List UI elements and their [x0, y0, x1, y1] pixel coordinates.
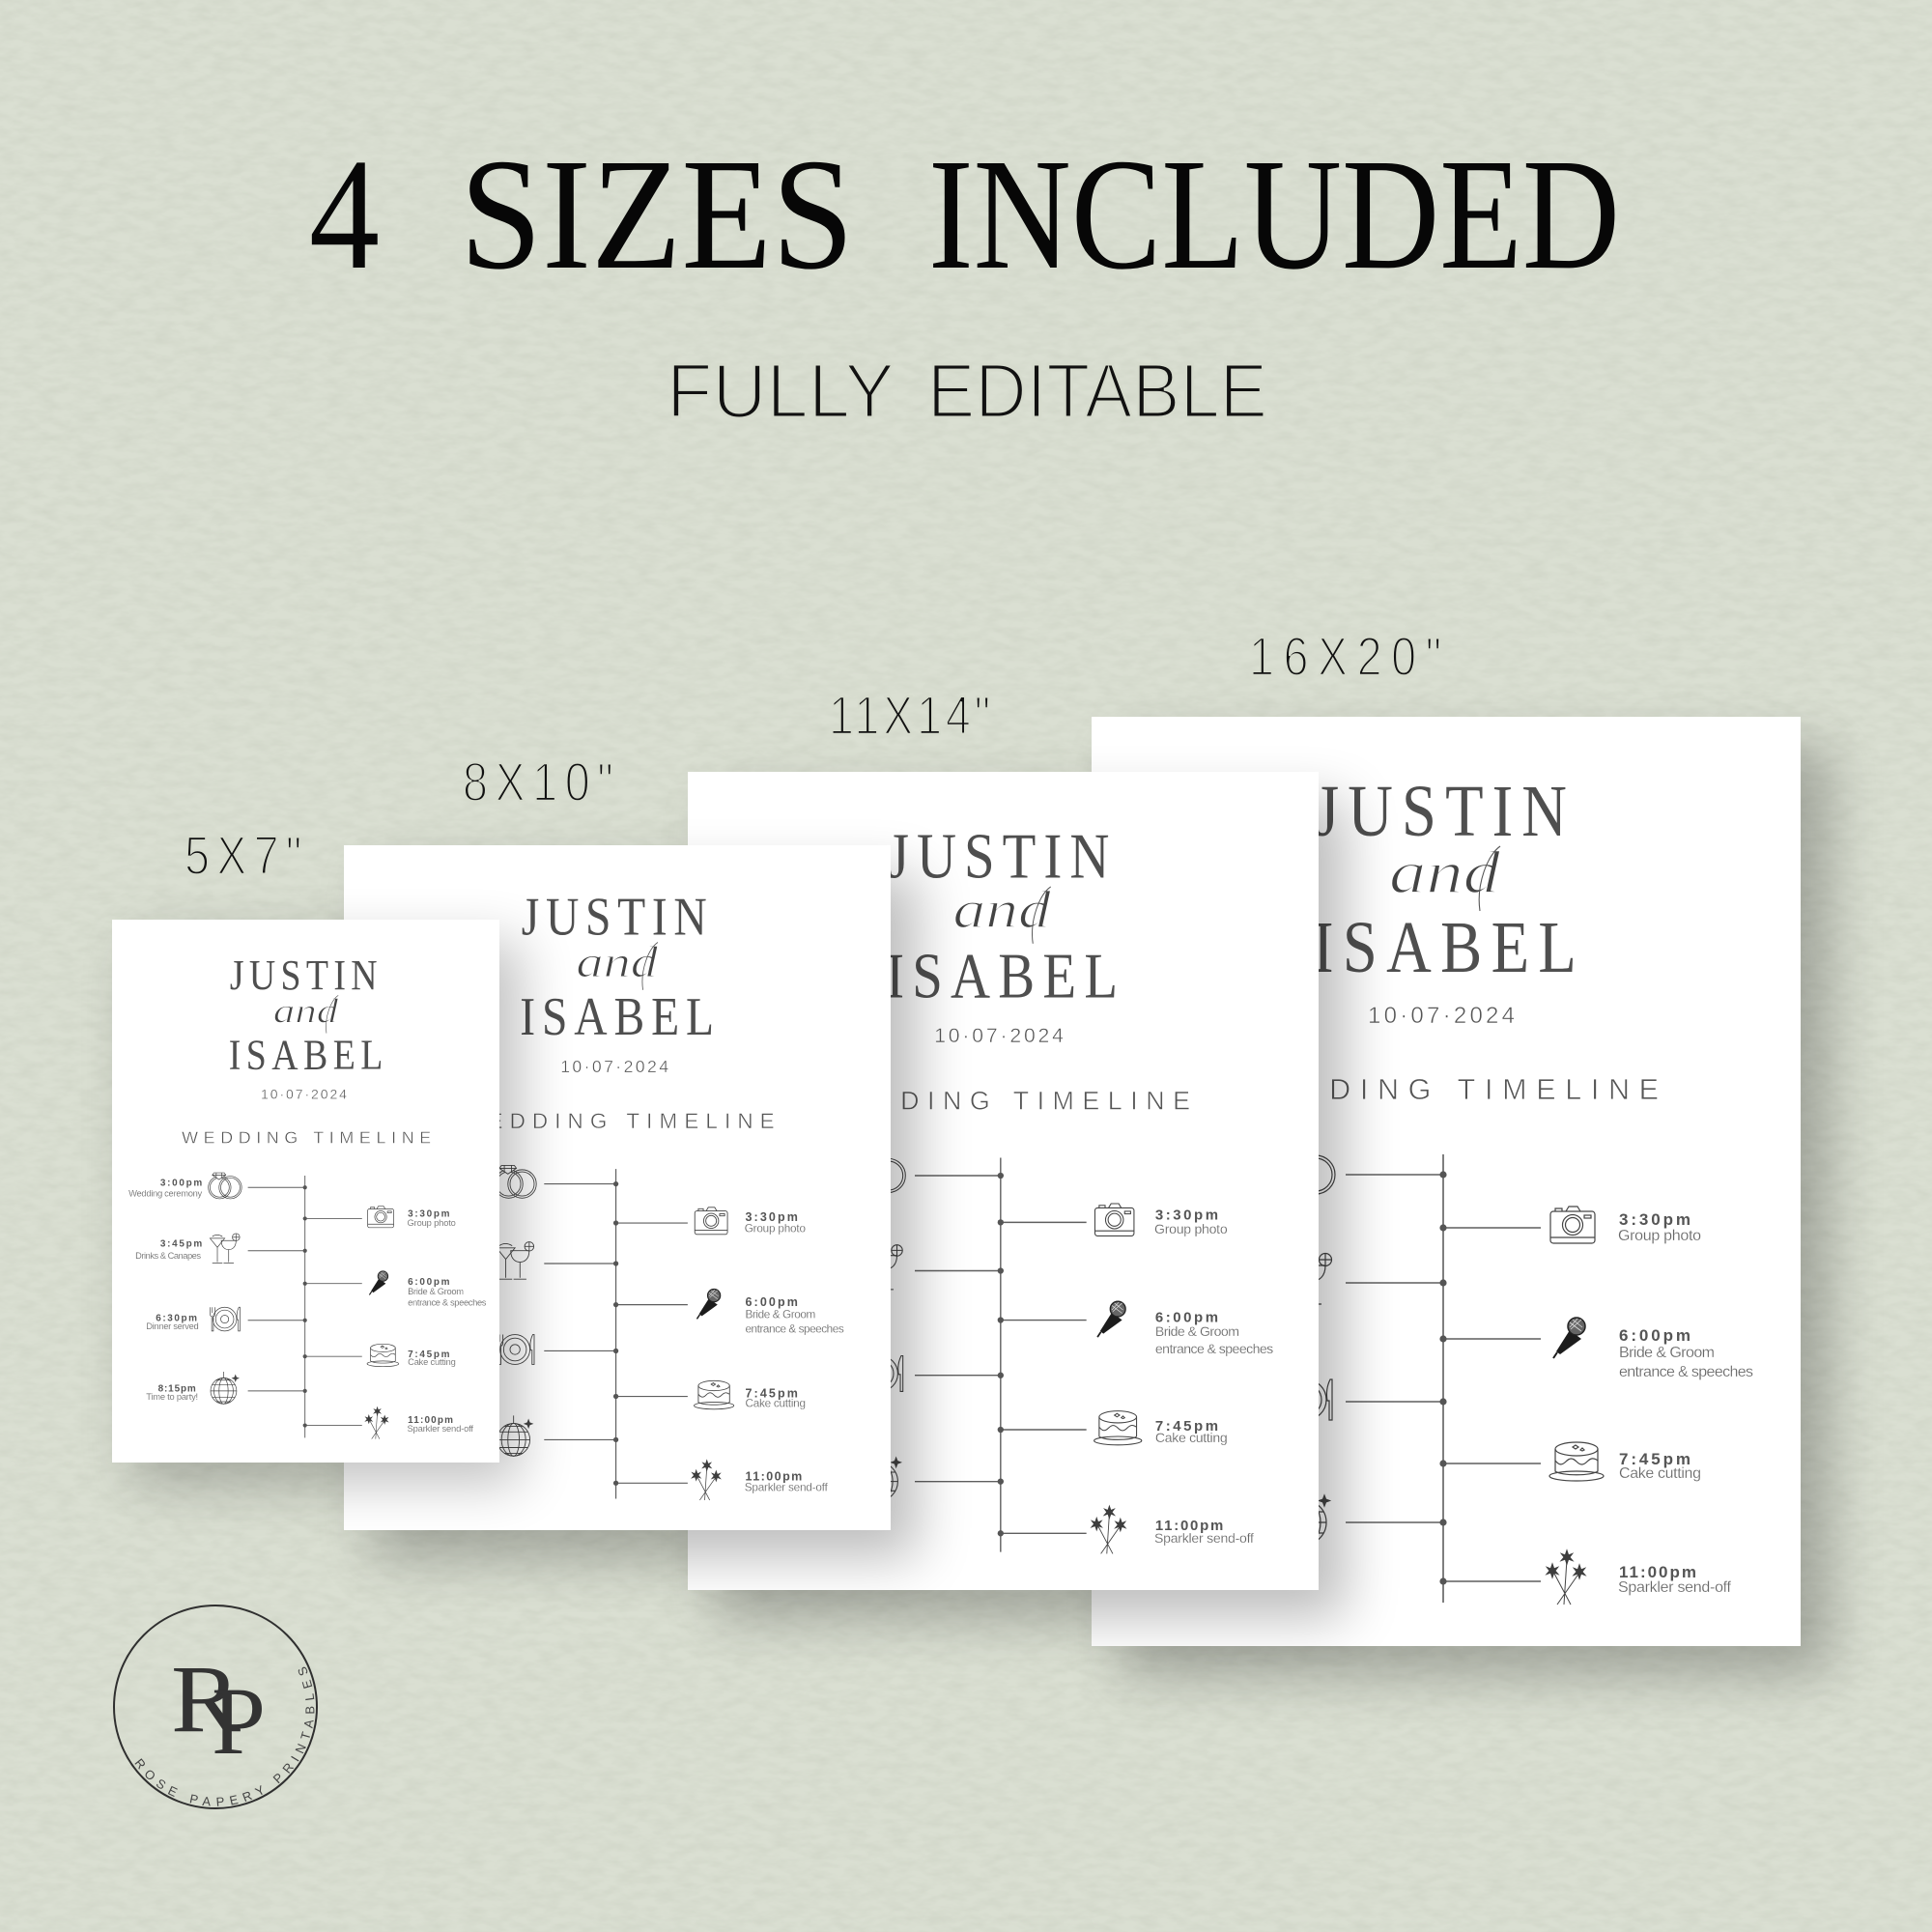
event: 7:45pm: Cake cutting [1619, 1465, 1701, 1482]
event: 3:45pm [1153, 1254, 1447, 1304]
date: 10·07·2024 [1368, 1003, 1515, 1029]
event: 6:00pm: 6:00pm [408, 1277, 450, 1288]
event: 3:45pm: Drinks & Canapes [746, 1270, 844, 1286]
event: 3:00pm: 3:00pm [783, 1160, 846, 1177]
names heading: ISABEL [886, 941, 1118, 1011]
event: 3:00pm: Wedding ceremony [735, 1177, 846, 1192]
names heading: JUSTIN [888, 821, 1109, 892]
event: 8:15pm: Time to party! [146, 1392, 198, 1402]
event: 8:15pm [762, 1453, 1004, 1501]
event: 11:00pm [613, 1459, 829, 1500]
event: 6:30pm: 6:30pm [777, 1364, 838, 1380]
event: 6:00pm: entrance & speeches [1619, 1364, 1753, 1380]
names heading: JUSTIN [230, 951, 378, 999]
event: 8:15pm [146, 1372, 307, 1404]
event: 3:30pm [303, 1207, 456, 1228]
event: 6:00pm [303, 1271, 487, 1308]
event: 3:45pm: 3:45pm [783, 1252, 846, 1268]
subtitle: FULLY [667, 348, 895, 434]
event: 3:00pm: 3:00pm [434, 1171, 487, 1184]
event: 11:00pm: Sparkler send-off [1154, 1530, 1254, 1546]
event: 7:45pm [1439, 1442, 1701, 1482]
names heading: JUSTIN [522, 888, 707, 947]
event: 3:00pm [1142, 1150, 1447, 1194]
event: 3:30pm: 3:30pm [1619, 1210, 1690, 1229]
panel: 16x20 card [1092, 717, 1801, 1646]
logo badge: ROSE PAPERY PRINTABLES [135, 1667, 315, 1806]
size label: 5x7: 5X7" [185, 826, 301, 887]
event: 8:15pm: Time to party! [416, 1441, 482, 1454]
names heading [229, 951, 383, 1078]
event: 3:00pm: Wedding ceremony [1142, 1178, 1267, 1194]
size label: 11x14: 11X14" [829, 686, 990, 747]
title: INCLUDED [928, 126, 1620, 302]
event: 3:30pm: Group photo [1154, 1221, 1228, 1236]
event: 7:45pm [998, 1411, 1228, 1445]
event: 11:00pm [303, 1406, 473, 1439]
event: 3:30pm [1439, 1207, 1701, 1244]
event: 11:00pm [1439, 1548, 1732, 1605]
panel: 8x10 card [344, 845, 891, 1530]
event: 7:45pm: Cake cutting [408, 1357, 456, 1367]
event: 6:30pm: Dinner served [416, 1352, 482, 1365]
names heading [886, 821, 1118, 1011]
event: 6:00pm: Bride & Groom [1619, 1345, 1715, 1361]
event: 7:45pm: 7:45pm [1619, 1450, 1690, 1468]
event: 3:45pm [403, 1242, 618, 1279]
event: 6:00pm [998, 1301, 1273, 1356]
event: 3:00pm: 3:00pm [1196, 1157, 1267, 1176]
panel: 5x7 card [112, 920, 499, 1463]
event: 3:00pm [735, 1153, 1004, 1193]
logo badge: R [171, 1645, 241, 1752]
logo badge: P [212, 1667, 266, 1775]
event: 11:00pm: 11:00pm [745, 1469, 802, 1483]
section title: WEDDING TIMELINE [815, 1086, 1190, 1115]
event: 6:00pm [1439, 1318, 1753, 1380]
event: 3:30pm: Group photo [408, 1218, 456, 1228]
title [309, 126, 1620, 302]
event: 6:00pm [613, 1289, 844, 1335]
names heading [520, 888, 714, 1047]
event: 11:00pm: Sparkler send-off [408, 1424, 473, 1434]
size label: 8x10: 8X10" [463, 753, 613, 813]
event: 6:30pm: 6:30pm [156, 1313, 197, 1323]
event: 3:45pm: Drinks & Canapes [135, 1251, 201, 1261]
event: 6:00pm: entrance & speeches [745, 1322, 844, 1335]
event: 7:45pm: 7:45pm [408, 1350, 450, 1360]
event: 7:45pm: 7:45pm [745, 1386, 798, 1400]
date: 10·07·2024 [560, 1057, 668, 1076]
event: 6:30pm [146, 1307, 307, 1331]
event: 3:30pm [613, 1208, 806, 1236]
event: 3:30pm: Group photo [745, 1223, 806, 1236]
event: 3:00pm: Wedding ceremony [128, 1189, 203, 1199]
event: 6:30pm: Dinner served [146, 1321, 199, 1331]
event: 11:00pm: 11:00pm [1619, 1563, 1696, 1581]
event: 6:30pm [762, 1355, 1004, 1392]
event: 11:00pm: Sparkler send-off [745, 1481, 829, 1493]
date: 10·07·2024 [934, 1025, 1064, 1047]
event: 8:15pm: 8:15pm [158, 1383, 196, 1394]
event: 3:00pm [128, 1173, 307, 1199]
section title: WEDDING TIMELINE [182, 1128, 431, 1148]
event: 3:30pm: 3:30pm [745, 1210, 798, 1224]
event: 11:00pm: 11:00pm [408, 1415, 453, 1426]
event: 7:45pm: Cake cutting [1155, 1430, 1228, 1445]
event: 6:00pm: entrance & speeches [1155, 1341, 1273, 1356]
section title: WEDDING TIMELINE [461, 1109, 775, 1133]
title: SIZES [460, 126, 854, 302]
size label: 16x20: 16X20" [1249, 627, 1441, 688]
event: 3:45pm [135, 1234, 307, 1264]
event: 8:15pm: Time to party! [1172, 1525, 1261, 1542]
event: 3:00pm: Wedding ceremony [394, 1185, 487, 1198]
timeline spine [615, 1169, 617, 1498]
event: 11:00pm [998, 1505, 1254, 1553]
names heading [1313, 771, 1577, 988]
event: 3:30pm [998, 1204, 1228, 1236]
logo badge [113, 1605, 318, 1809]
event: 6:00pm: Bride & Groom [408, 1287, 464, 1296]
names heading: ISABEL [229, 1031, 383, 1078]
event: 3:45pm: 3:45pm [160, 1239, 202, 1250]
event: 8:15pm: Time to party! [762, 1483, 840, 1498]
names heading: ISABEL [520, 988, 714, 1047]
event: 11:00pm: Sparkler send-off [1618, 1579, 1732, 1596]
names heading: JUSTIN [1315, 771, 1567, 852]
event: 7:45pm [303, 1344, 456, 1367]
names heading: and [273, 991, 339, 1030]
title: 4 [309, 126, 380, 302]
event: 6:30pm: 6:30pm [1188, 1388, 1259, 1406]
event: 6:00pm: Bride & Groom [745, 1309, 815, 1321]
subtitle [667, 348, 1267, 434]
event: 6:00pm: Bride & Groom [1155, 1323, 1239, 1339]
subtitle: EDITABLE [927, 348, 1267, 434]
event: 6:30pm [416, 1335, 618, 1365]
panel: 11x14 card [688, 772, 1319, 1590]
event: 3:30pm: 3:30pm [1155, 1208, 1218, 1224]
event: 8:15pm: 8:15pm [1192, 1509, 1257, 1527]
event: 8:15pm: 8:15pm [431, 1430, 479, 1443]
event: 8:15pm [1172, 1490, 1447, 1545]
timeline spine [304, 1176, 306, 1437]
event: 3:45pm [746, 1245, 1004, 1290]
names heading: and [576, 937, 658, 986]
event: 6:30pm [1172, 1379, 1447, 1421]
event: 3:45pm: Drinks & Canapes [403, 1264, 485, 1276]
event: 7:45pm [613, 1380, 806, 1410]
event: 7:45pm: Cake cutting [745, 1398, 806, 1410]
event: 3:30pm: Group photo [1618, 1228, 1701, 1244]
event: 3:30pm: 3:30pm [408, 1209, 450, 1220]
section title: WEDDING TIMELINE [1233, 1073, 1659, 1106]
event: 6:30pm: Dinner served [1172, 1405, 1262, 1421]
event: 3:45pm: 3:45pm [1196, 1262, 1267, 1280]
event: 6:00pm: 6:00pm [1619, 1326, 1690, 1345]
event: 11:00pm: 11:00pm [1155, 1518, 1223, 1534]
event: 6:30pm: 6:30pm [428, 1341, 480, 1354]
event: 8:15pm [416, 1415, 618, 1456]
event: 7:45pm: 7:45pm [1155, 1418, 1218, 1435]
event: 3:00pm [394, 1165, 618, 1198]
event: 6:00pm: 6:00pm [745, 1295, 798, 1309]
names heading: ISABEL [1313, 907, 1577, 988]
event: 6:30pm: Dinner served [762, 1377, 840, 1392]
names heading: and [953, 880, 1052, 939]
event: 3:00pm: 3:00pm [160, 1179, 202, 1189]
event: 8:15pm: 8:15pm [780, 1470, 837, 1487]
event: 3:45pm: 3:45pm [434, 1248, 487, 1262]
event: 6:00pm: 6:00pm [1155, 1309, 1218, 1325]
date: 10·07·2024 [261, 1086, 347, 1101]
timeline spine [1000, 1158, 1002, 1552]
event: 3:45pm: Drinks & Canapes [1153, 1284, 1265, 1300]
names heading: and [1389, 840, 1501, 906]
event: 6:00pm: entrance & speeches [408, 1298, 487, 1308]
timeline spine [1442, 1154, 1444, 1603]
